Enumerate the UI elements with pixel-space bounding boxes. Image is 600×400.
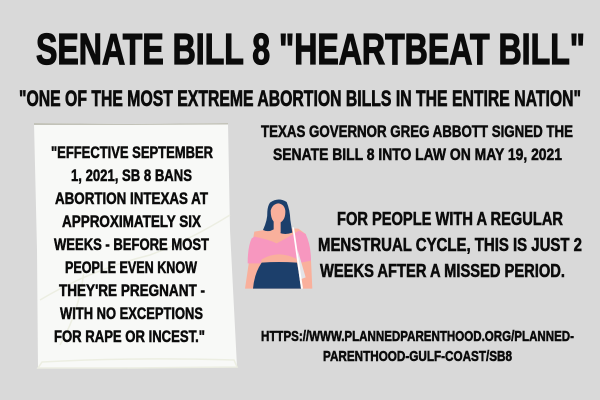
panel: paper note quote [34,123,237,368]
quote text: PEOPLE EVEN KNOW [65,258,198,277]
quote text [51,143,213,346]
source url: PARENTHOOD-GULF-COAST/SB8 [323,349,512,365]
quote text: "EFFECTIVE SEPTEMBER [51,143,213,162]
paper top edge wear [34,123,228,125]
quote text: WEEKS - BEFORE MOST [54,235,209,254]
source url [261,329,574,365]
quote text: FOR RAPE OR INCEST." [54,327,205,346]
paper creases [38,215,237,368]
quote text: THEY'RE PREGNANT - [59,281,205,300]
quote text: ABORTION INTEXAS AT [55,189,208,208]
paper sheet [34,123,237,368]
quote text: APPROXIMATELY SIX [62,212,202,231]
quote text: 1, 2021, SB 8 BANS [71,166,192,185]
icon: woman illustration [245,199,312,289]
quote text: WITH NO EXCEPTIONS [60,304,203,323]
governor statement [261,122,573,164]
menstrual cycle statement [318,209,582,281]
